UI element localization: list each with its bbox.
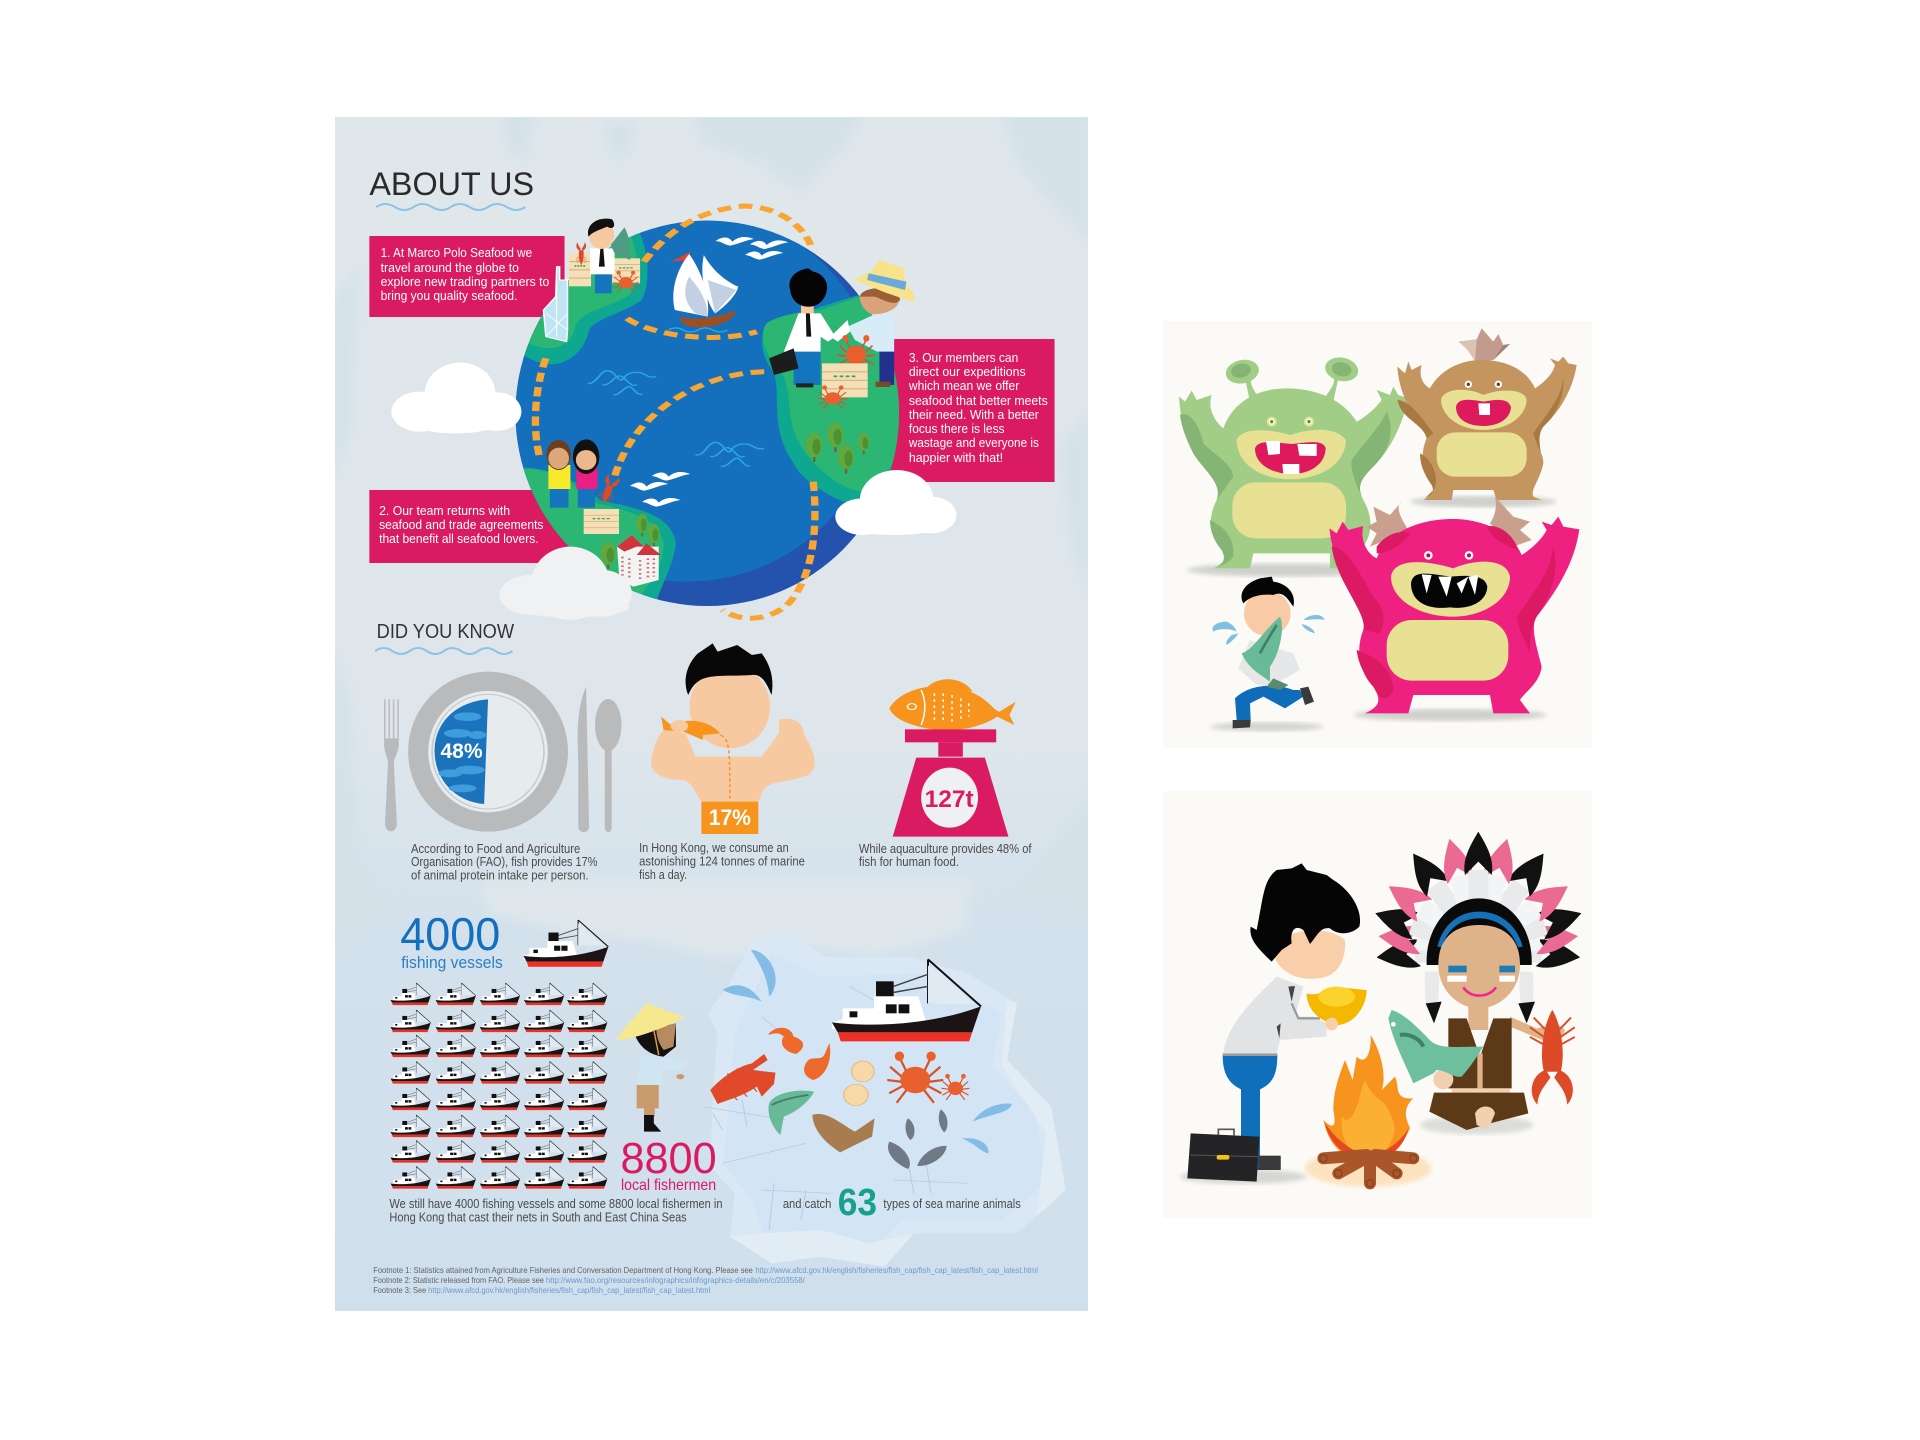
stat: 4000 fishing vessels: 4000	[400, 909, 500, 960]
text: footnotes: Footnote 2: Statistic released from FAO. Please see	[373, 1276, 545, 1285]
arrow: dashed trade route	[535, 206, 815, 618]
icon: pink monster	[1329, 497, 1579, 721]
panel: infographic background	[330, 110, 1095, 1311]
icon: seagulls	[630, 237, 788, 507]
stat: 63 types of sea marine animals: types of sea marine animals	[883, 1197, 1021, 1211]
icon: green monster	[1179, 354, 1408, 577]
callout: step 1: bring you quality seafood.	[381, 289, 517, 303]
icon: lobster	[710, 1054, 775, 1104]
text: plate caption: According to Food and Agriculture	[411, 842, 580, 856]
icon: couple and lobster crate	[546, 439, 661, 587]
callout: step 3: 3. Our members can	[909, 351, 1018, 365]
callout: step 2: seafood and trade agreements	[379, 518, 543, 532]
stat: 127t label: 127t	[925, 786, 974, 813]
icon: merchant with crates and fish	[569, 219, 640, 293]
icon: large fishing boat	[523, 920, 608, 967]
icon: brown monster	[1397, 328, 1577, 507]
icon: big trawler	[832, 959, 981, 1041]
callout: step 3: focus there is less	[909, 422, 1005, 436]
text: plate caption: of animal protein intake per person.	[411, 868, 589, 883]
panel: monsters chasing man illustration	[1163, 321, 1592, 748]
panel: fishing net with sea animals	[703, 932, 1066, 1267]
chart: globe illustration with trade route	[391, 206, 956, 620]
icon: shrimp	[768, 1028, 830, 1080]
callout: step 2: that benefit all seafood lovers.	[379, 532, 539, 546]
callout: step 2	[369, 490, 575, 563]
heading: did you know	[375, 621, 514, 654]
callout: step 3: seafood that better meets	[909, 394, 1048, 408]
chart: plate pie 48%	[384, 672, 621, 832]
callout: step 3: happier with that!	[909, 451, 1003, 465]
icon: sailing ship	[669, 252, 738, 332]
text: plate caption	[411, 842, 597, 883]
globe and land masses	[516, 220, 900, 606]
title: about us: ABOUT US	[369, 166, 534, 202]
icon: sea ripples	[588, 371, 764, 466]
icon: running man with fish	[1210, 577, 1324, 731]
text: fishing summary: Hong Kong that cast their nets in South and East China Seas	[389, 1210, 687, 1225]
heading: did you know: DID YOU KNOW	[377, 621, 514, 643]
callout: step 3	[884, 339, 1055, 482]
stat: 63 types of sea marine animals: and catch	[783, 1197, 831, 1211]
text: footnotes: http://www.afcd.gov.hk/english/fisheries/fish_cap/fish_cap_latest/fish_cap_latest.html	[755, 1266, 1038, 1275]
callout: step 3: their need. With a better	[909, 408, 1039, 422]
text: plate caption: Organisation (FAO), fish provides 17%	[411, 855, 597, 869]
stat: 8800 local fishermen: 8800	[620, 1135, 717, 1183]
callout: step 1: 1. At Marco Polo Seafood we	[381, 246, 532, 260]
callout: step 1: travel around the globe to	[381, 261, 519, 275]
text: scale caption: While aquaculture provides 48% of	[859, 842, 1032, 856]
net backdrop	[703, 932, 1066, 1267]
text: footnotes: Footnote 1: Statistics attained from Agriculture Fisheries and Conversation Department of Hong Kong. Please see	[373, 1266, 753, 1275]
icon: hong kong tower	[543, 267, 567, 342]
panel: business man meets chief illustration	[1163, 791, 1592, 1218]
icon: chief with feather headdress	[1371, 832, 1586, 1134]
text: fishing summary: We still have 4000 fishing vessels and some 8800 local fishermen in	[389, 1197, 723, 1211]
stat: 17% label: 17%	[709, 805, 751, 830]
icon: man with gold ingot	[1180, 863, 1367, 1184]
icon: fisherman	[616, 1003, 687, 1132]
stat: 4000 fishing vessels: fishing vessels	[401, 953, 503, 972]
callout: step 3: direct our expeditions	[909, 365, 1026, 379]
text: fishing summary	[389, 1197, 723, 1225]
callout: step 1	[369, 236, 565, 317]
text: scale caption: fish for human food.	[859, 855, 959, 869]
text: footnotes: http://www.afcd.gov.hk/english/fisheries/fish_cap/fish_cap_latest/fish_cap_latest.html	[428, 1286, 710, 1295]
text: footnotes: Footnote 3: See	[373, 1286, 427, 1295]
icon: crabs	[887, 1051, 969, 1103]
text: footnotes	[373, 1266, 1038, 1295]
text: muscle man caption: astonishing 124 tonnes of marine	[639, 854, 805, 869]
callout: step 3: which mean we offer	[908, 379, 1019, 393]
icon: handshake with partner	[769, 260, 915, 473]
callout: step 1: explore new trading partners to	[381, 275, 549, 289]
stat: 63 types of sea marine animals	[783, 1181, 1021, 1223]
icon: fish on weighing scale	[889, 679, 1016, 837]
text: scale caption	[859, 842, 1032, 869]
icon: mussels	[888, 1109, 948, 1169]
panel: main infographic content	[369, 166, 1066, 1295]
callout: step 3: wastage and everyone is	[908, 436, 1039, 450]
text: footnotes: http://www.fao.org/resources/infographics/infographics-details/en/c/203558/	[546, 1276, 806, 1285]
text: muscle man caption	[639, 841, 805, 882]
icon: clouds	[391, 363, 956, 620]
icon: water splashes	[722, 950, 1012, 1153]
icon: brown fish	[812, 1114, 875, 1152]
icon: muscular man eating fish	[651, 643, 815, 834]
stat: 8800 local fishermen: local fishermen	[621, 1177, 716, 1194]
stat: 63 types of sea marine animals: 63	[838, 1181, 877, 1223]
text: muscle man caption: In Hong Kong, we consume an	[639, 841, 789, 855]
callout: step 2: 2. Our team returns with	[379, 504, 510, 518]
icon: scallop shells	[844, 1061, 874, 1106]
text: muscle man caption: fish a day.	[639, 868, 687, 882]
icon: salmon	[768, 1091, 814, 1135]
chart: pictogram of fishing vessels	[390, 983, 607, 1189]
stat: 48% label: 48%	[440, 740, 483, 763]
icon: campfire	[1305, 1035, 1432, 1187]
